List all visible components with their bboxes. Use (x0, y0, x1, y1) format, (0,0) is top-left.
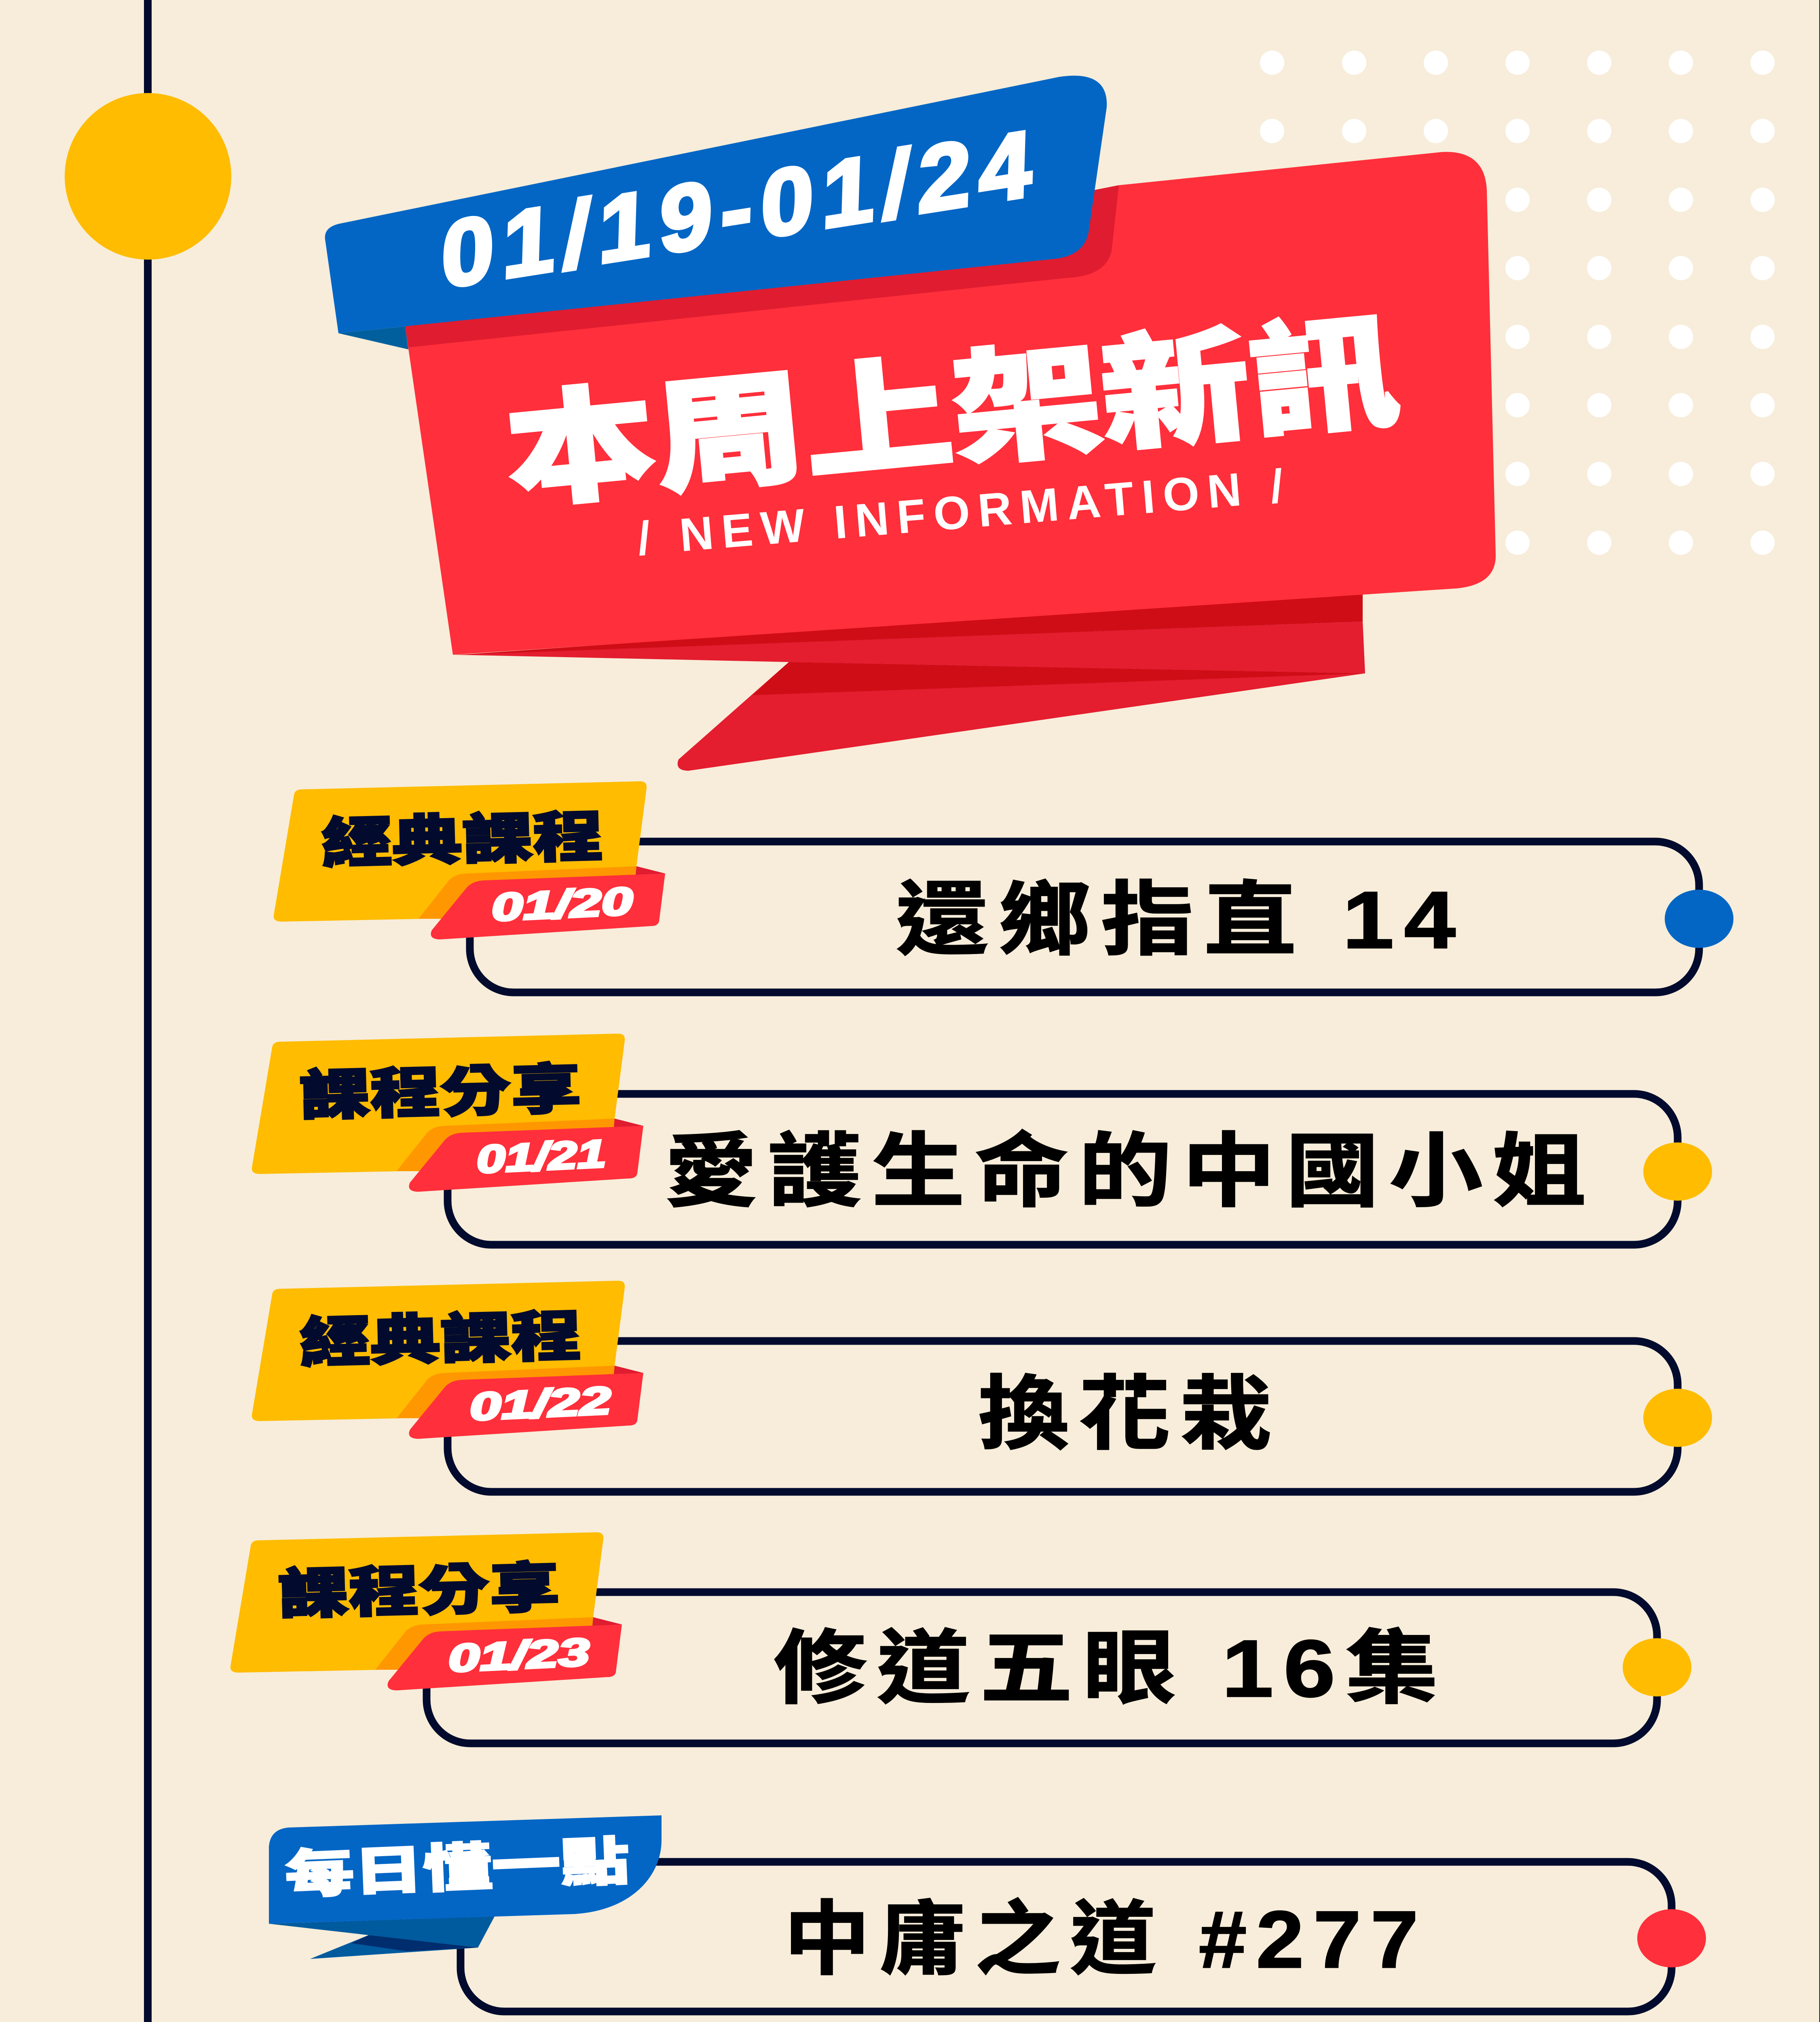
row 1 text: 還鄉指直 14 (896, 875, 1466, 965)
row 2 outline and dot (448, 1094, 1712, 1245)
tag: 經典課程 01/20 (274, 781, 665, 939)
tag: 課程分享 01/23: 01/23 (447, 1631, 591, 1680)
tag: 課程分享 01/21: 課程分享 (298, 1044, 582, 1131)
row 3 text: 換花栽 (978, 1369, 1281, 1459)
row 5 text: 中庸之道 #277 (784, 1895, 1428, 1985)
main title: 本周上架新訊 (497, 271, 1406, 533)
white dot grid top right (1260, 51, 1775, 555)
date range heading: 01/19-01/24 (440, 111, 1033, 308)
decorative yellow circle top left (65, 93, 231, 260)
row 4 outline and dot (427, 1592, 1691, 1743)
timeline: vertical line with dots (125, 0, 171, 2022)
tag: 課程分享 01/23 (230, 1532, 622, 1690)
tag: 經典課程 01/20: 經典課程 (320, 792, 604, 878)
row 4 text: 修道五眼 16集 (774, 1624, 1448, 1714)
header ribbon banner (325, 76, 1496, 771)
row 1 outline and dot (470, 842, 1733, 992)
tag: 經典課程 01/22: 經典課程 (298, 1291, 582, 1378)
tag: 每日懂一點 row 5: 每日懂一點 (283, 1819, 631, 1908)
tag: 課程分享 01/21 (252, 1034, 643, 1192)
tag: 課程分享 01/21: 01/21 (476, 1132, 607, 1181)
row 3 outline and dot (448, 1341, 1712, 1492)
tag: 經典課程 01/22 (252, 1281, 643, 1439)
subtitle: / NEW INFORMATION / (635, 459, 1285, 565)
row 2 text: 愛護生命的中國小姐 (664, 1127, 1596, 1217)
tag: 經典課程 01/22: 01/22 (469, 1379, 612, 1429)
tag: 課程分享 01/23: 課程分享 (277, 1543, 561, 1629)
tag: 經典課程 01/20: 01/20 (490, 880, 634, 929)
row 5 outline and dot (461, 1862, 1706, 2011)
tag: 每日懂一點 row 5 (269, 1815, 662, 1959)
